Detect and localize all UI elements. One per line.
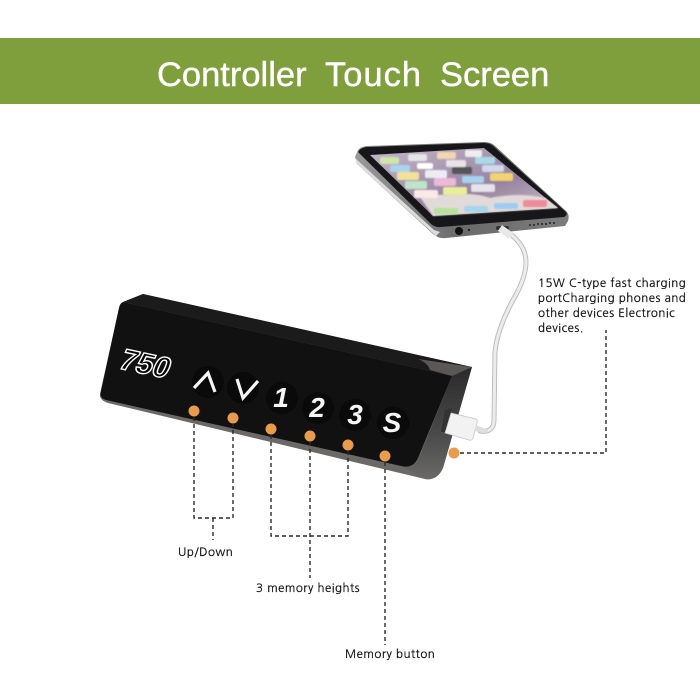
title: Controller (157, 56, 307, 94)
label: 3 memory heights: 3 memory heights (256, 582, 360, 594)
button: 1 (266, 382, 298, 414)
phone ports (455, 222, 555, 235)
button: 2 (302, 392, 334, 424)
button: 1: 1 (273, 382, 289, 413)
marker dots (188, 406, 460, 462)
button: up (192, 366, 224, 398)
label: up/down: Up/Down (178, 546, 233, 558)
app icons (380, 150, 547, 214)
button: 2: 2 (308, 392, 325, 423)
title: Touch (325, 56, 422, 94)
USB plug (441, 408, 488, 440)
leader line: memory button (384, 462, 386, 645)
title banner (0, 38, 700, 104)
controller body and lower edge (100, 294, 472, 479)
phone screen (370, 148, 558, 216)
controller front face (101, 302, 452, 467)
leader line: charging port (460, 330, 606, 453)
button: 3 (339, 399, 371, 431)
charging cable (480, 228, 526, 431)
title: Screen (440, 56, 549, 94)
button: 3: 3 (347, 399, 363, 430)
leader lines: up/down (194, 417, 233, 540)
label: memory button: Memory button (345, 648, 435, 660)
label: charging port description: portCharging phones and (538, 292, 686, 304)
controller top face (123, 294, 472, 376)
leader lines: memory heights (271, 435, 348, 578)
button: S (377, 407, 409, 439)
label: charging port description: other devices Electronic (538, 307, 675, 319)
phone (355, 142, 569, 238)
controller right side (404, 367, 472, 479)
button: down (227, 372, 259, 404)
label: charging port description: 15W C-type fast charging (538, 277, 686, 289)
height display: 750 (114, 344, 177, 385)
label: charging port description: devices. (538, 322, 584, 334)
button: S: S (383, 407, 402, 438)
controller (100, 294, 472, 479)
